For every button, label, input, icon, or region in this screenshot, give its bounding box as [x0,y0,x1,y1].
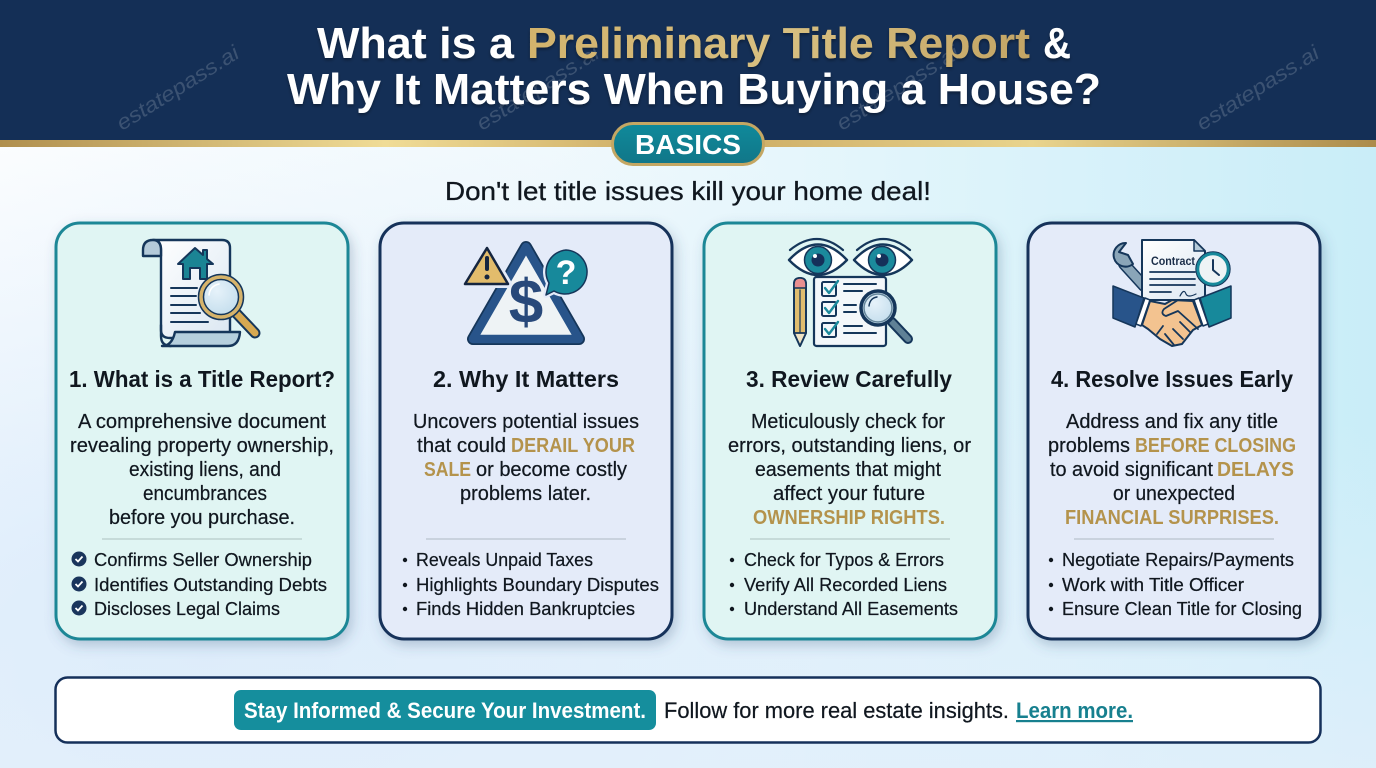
description: problems [1048,435,1130,457]
description: that could [417,435,506,457]
icon: warning triangle, dollar and question bubble [465,247,587,339]
description [413,411,639,505]
description: revealing property ownership, [70,435,334,457]
title [287,19,1101,114]
bullet list: Negotiate Repairs/Payments [1062,549,1294,570]
title: Why It Matters When Buying a House? [287,65,1101,114]
link: Learn more. [1016,698,1133,723]
description: existing liens, and [129,459,281,481]
watermarks: estatepass.ai [112,41,245,135]
heading: 3. Review Carefully [746,366,952,392]
icon: warning triangle, dollar and question bubble: ? [556,254,576,292]
watermarks: estatepass.ai [1192,41,1325,135]
watermarks: estatepass.ai [472,41,605,135]
bullet list: Ensure Clean Title for Closing [1062,598,1302,619]
tagline: Don't let title issues kill your home deal! [445,176,931,206]
title: & [1043,19,1071,68]
description: to avoid significant [1050,459,1213,481]
description: or become costly [476,459,627,481]
description: FINANCIAL SURPRISES. [1065,507,1279,529]
bullet list [730,549,958,619]
badge: basics [612,124,764,164]
header banner [0,0,1376,147]
heading: 4. Resolve Issues Early [1051,366,1293,392]
description [728,411,971,529]
checklist: Confirms Seller Ownership [94,549,312,570]
checklist [72,549,327,619]
badge: basics: BASICS [635,129,741,160]
watermarks: estatepass.ai [832,41,965,135]
panel: card 4 resolve issues early [1028,223,1320,639]
icon: eyes, checklist, pencil and magnifier [789,239,912,346]
description: encumbrances [143,483,267,505]
title: What is a [317,19,515,68]
description: before you purchase. [109,507,295,529]
description: SALE [424,459,471,481]
bullet list: Reveals Unpaid Taxes [416,549,593,570]
description [70,411,334,529]
footer call to action: Follow for more real estate insights. [664,698,1009,723]
checklist: Identifies Outstanding Debts [94,574,327,595]
icon: contract, wrench, clock and handshake [1113,240,1231,346]
bullet list: Understand All Easements [744,598,958,619]
bullet list [403,549,659,619]
icon: warning triangle, dollar and question bubble: $ [509,268,543,337]
bullet list: Check for Typos & Errors [744,549,944,570]
description: DELAYS [1217,459,1294,481]
description: OWNERSHIP RIGHTS. [753,507,945,529]
bullet list: Finds Hidden Bankruptcies [416,598,635,619]
description: affect your future [773,483,925,505]
panel: card 3 review carefully [704,223,996,639]
description: easements that might [755,459,941,481]
checklist: Discloses Legal Claims [94,598,280,619]
bullet list [1049,549,1302,619]
description: or unexpected [1113,483,1235,505]
description: errors, outstanding liens, or [728,435,971,457]
heading: 2. Why It Matters [433,366,619,392]
footer call to action: Stay Informed & Secure Your Investment. [244,698,646,723]
panel: card 2 why it matters [380,223,672,639]
description: DERAIL YOUR [511,435,636,457]
teal highlight pill [234,690,656,730]
description [1048,411,1296,529]
title: Preliminary Title Report [527,19,1030,68]
description: problems later. [460,483,591,505]
description: Address and fix any title [1066,411,1278,433]
icon: contract, wrench, clock and handshake: Contract [1151,256,1195,268]
panel: card 1 what is a title report [56,223,348,639]
heading: 1. What is a Title Report? [69,366,335,392]
watermarks [112,41,1325,135]
description: Meticulously check for [751,411,945,433]
bullet list: Verify All Recorded Liens [744,574,947,595]
bullet list: Highlights Boundary Disputes [416,574,659,595]
description: BEFORE CLOSING [1135,435,1296,457]
bullet list: Work with Title Officer [1062,574,1244,595]
gold rule [0,140,1376,147]
icon: document with house and magnifier [143,240,255,346]
footer call to action [56,678,1320,742]
description: A comprehensive document [78,411,326,433]
description: Uncovers potential issues [413,411,639,433]
